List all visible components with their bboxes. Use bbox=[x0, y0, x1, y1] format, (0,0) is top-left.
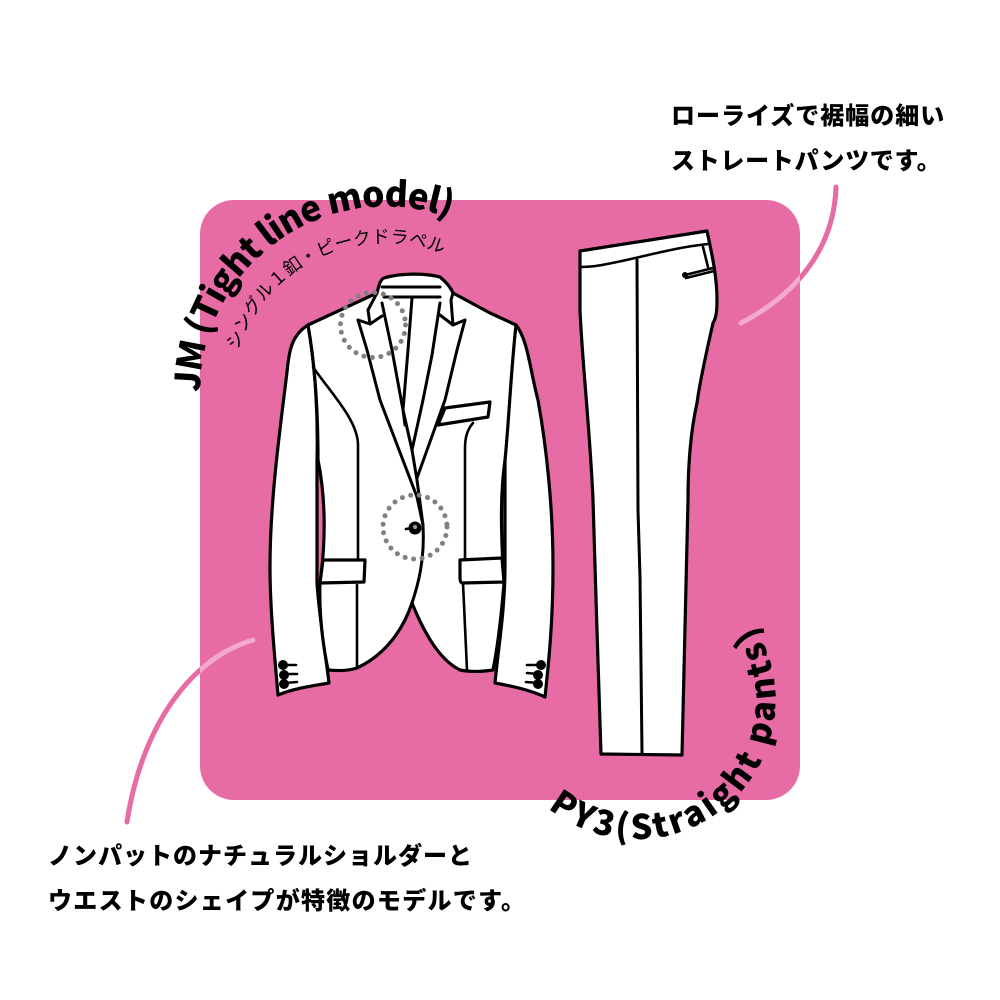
crease bbox=[637, 260, 642, 753]
leader line: jacket callout bbox=[127, 640, 253, 822]
collar and lapels bbox=[358, 287, 465, 603]
right hip pocket bbox=[460, 558, 504, 583]
curved subtitle: jacket: シングル１釦・ピークドラペル bbox=[226, 229, 444, 348]
trouser silhouette bbox=[580, 231, 717, 755]
left cuff buttons bbox=[278, 660, 297, 689]
jacket left sleeve bbox=[270, 325, 329, 695]
panel: pink background bbox=[200, 200, 800, 800]
main button bbox=[406, 522, 422, 534]
curved heading: trousers: PY3(Straight pants) bbox=[550, 628, 777, 846]
illustration: trousers bbox=[580, 231, 717, 755]
right cuff buttons bbox=[526, 660, 546, 689]
left hip pocket bbox=[320, 560, 365, 583]
callout text: jacket: ウエストのシェイプが特徴のモデルです。 bbox=[48, 881, 526, 916]
callout text: trousers: ローライズで裾幅の細い bbox=[671, 96, 945, 131]
callout text: trousers: ストレートパンツです。 bbox=[671, 141, 942, 176]
back pocket bbox=[682, 247, 714, 278]
illustration: jacket bbox=[270, 274, 553, 697]
chest pocket bbox=[438, 402, 490, 425]
jacket body bbox=[308, 274, 516, 672]
jacket right sleeve bbox=[495, 325, 553, 697]
leader line: trousers callout bbox=[741, 187, 836, 323]
callout text: jacket: ノンパットのナチュラルショルダーと bbox=[48, 836, 473, 871]
curved heading: jacket: JM (Tight line model) bbox=[174, 178, 452, 392]
highlight circle: button bbox=[383, 495, 447, 559]
seams bbox=[313, 367, 473, 670]
highlight circle: peak lapel bbox=[340, 292, 406, 358]
waistband bbox=[580, 244, 708, 267]
